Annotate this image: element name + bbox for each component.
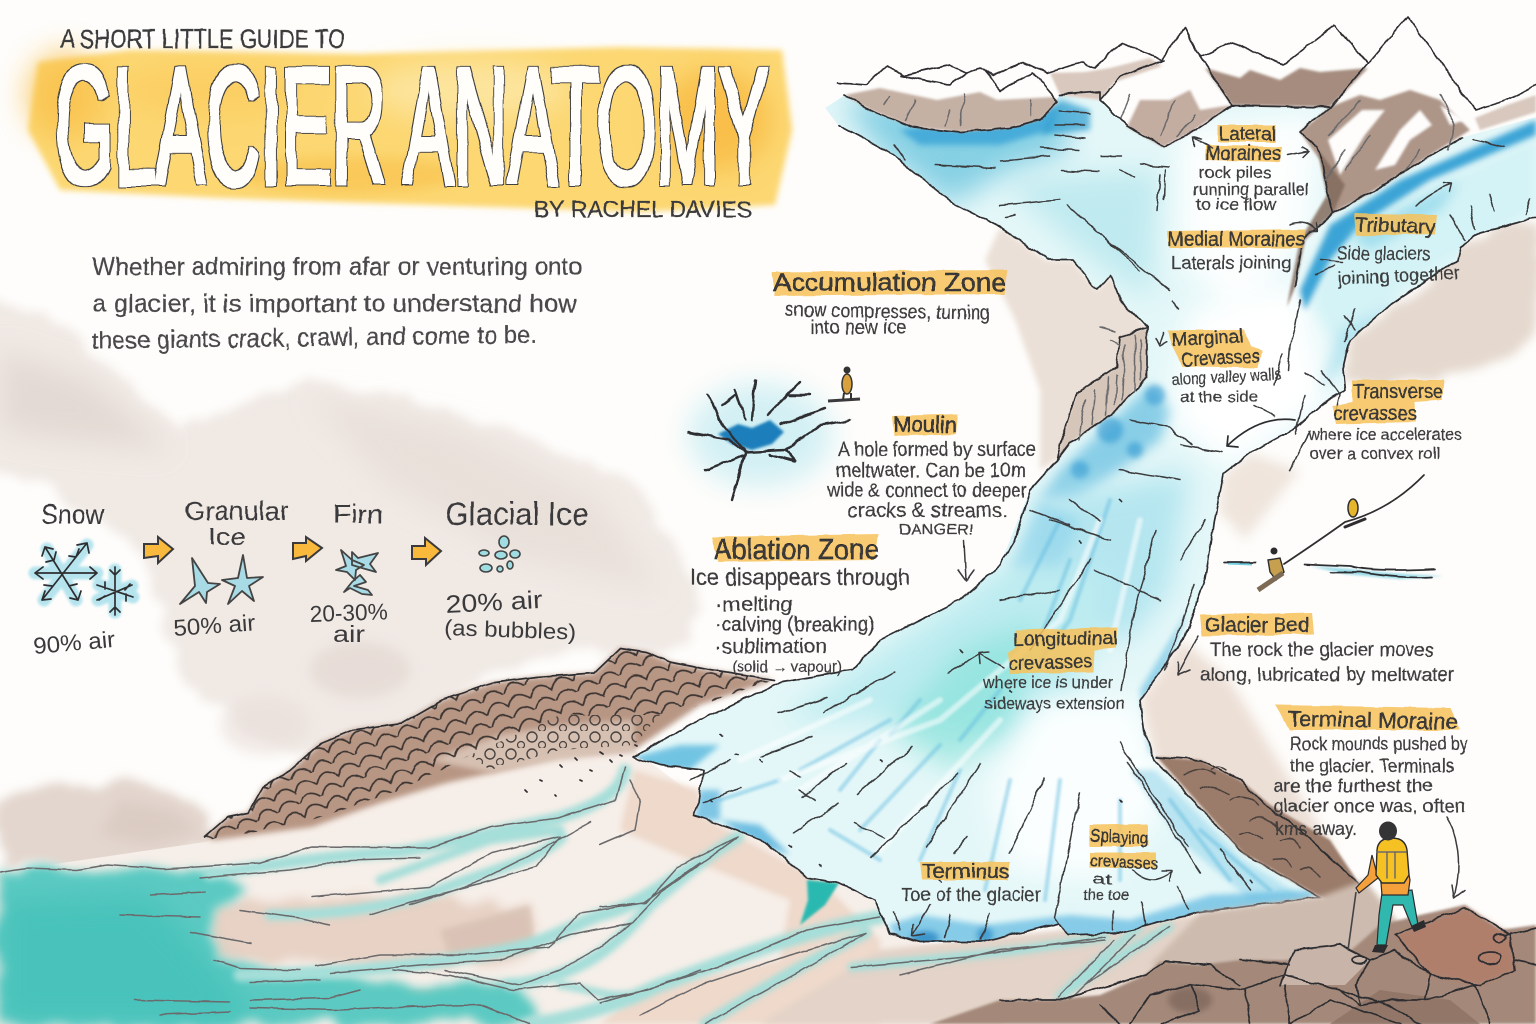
label: splaying crevasses: crevasses: [1090, 851, 1159, 874]
stage: snow: [32, 499, 133, 659]
label: transverse crevasses: where ice accelerates: [1307, 425, 1462, 444]
right moraine and ground: [1150, 757, 1400, 985]
label: medial moraines: Laterals joining: [1171, 253, 1291, 273]
label: terminal moraine: glacier once was, often: [1273, 796, 1465, 816]
label: transverse crevasses: crevasses: [1333, 403, 1417, 425]
label: terminus: [901, 861, 1042, 936]
watercolour clouds: [0, 295, 700, 868]
label: terminal moraine: the glacier. Terminals: [1290, 756, 1454, 776]
head: [1379, 822, 1397, 840]
legs: [1377, 890, 1418, 945]
boots: [1372, 920, 1426, 953]
moulin scale figure: [828, 366, 860, 401]
foreground rocks: [930, 905, 1536, 1024]
rock cliff: [1057, 328, 1147, 460]
label: terminal moraine: are the furthest the: [1273, 776, 1433, 796]
label: moulin: meltwater. Can be 10m: [836, 460, 1026, 482]
label: medial moraines: Medial Moraines: [1168, 228, 1305, 251]
label: ablation zone: ·melting: [715, 594, 793, 616]
label: lateral moraines: Lateral: [1219, 124, 1276, 145]
title wash: [25, 47, 792, 212]
label: ablation zone: ·calving (breaking): [715, 614, 875, 636]
label: moulin: [826, 412, 1036, 581]
arrow: snow to granular: [144, 537, 173, 563]
left moraine: [205, 648, 774, 840]
label: longitudinal crevasses: Longitudinal: [1013, 628, 1118, 651]
label: moulin: Moulin: [893, 412, 957, 437]
label: marginal crevasses: [1156, 326, 1282, 406]
label: transverse crevasses: Transverse: [1353, 381, 1443, 403]
label: tributary: Side glaciers: [1337, 244, 1430, 265]
label: transverse crevasses: over a convex roll: [1310, 444, 1440, 463]
stage: granular ice: Granular: [184, 496, 289, 526]
label: terminal moraine: kms away.: [1275, 819, 1357, 839]
label: accumulation zone: Accumulation Zone: [773, 269, 1006, 297]
label: longitudinal crevasses: crevasses: [1008, 651, 1093, 675]
ground slopes: [985, 217, 1536, 853]
label: ablation zone: ·sublimation: [715, 636, 827, 658]
arm: [1356, 855, 1378, 893]
label: accumulation zone: snow compresses, turning: [785, 299, 990, 325]
label: glacier bed: Glacier Bed: [1205, 614, 1309, 637]
label: ablation zone: [690, 534, 910, 676]
stage: firn: Firn: [333, 499, 383, 529]
label: tributary: [1336, 183, 1460, 289]
label: glacier bed: along, lubricated by meltwater: [1200, 665, 1455, 686]
label: terminal moraine: Rock mounds pushed by: [1290, 734, 1468, 754]
label: terminal moraine: [1273, 705, 1468, 898]
label: medial moraines: [1167, 222, 1317, 273]
stage: granular ice: Ice: [208, 523, 246, 551]
label: terminus: Toe of the glacier: [901, 885, 1042, 906]
label: longitudinal crevasses: [979, 627, 1125, 713]
label: glacier bed: [1178, 612, 1455, 686]
label: lateral moraines: [1193, 124, 1309, 214]
label: moulin: A hole formed by surface: [838, 439, 1036, 461]
intro text: these giants crack, crawl, and come to be.: [92, 321, 537, 355]
label: marginal crevasses: along valley walls: [1171, 366, 1282, 389]
intro text: a glacier, it is important to understand how: [92, 290, 578, 318]
label: marginal crevasses: at the side: [1180, 389, 1258, 406]
label: ablation zone: Ice disappears through: [690, 564, 910, 590]
panel: ice formation stages: [32, 496, 589, 659]
label: splaying crevasses: at: [1092, 871, 1113, 888]
label: lateral moraines: to ice flow: [1196, 195, 1277, 214]
label: moulin: wide & connect to deeper: [826, 480, 1027, 502]
stage: glacial ice: 20% air: [445, 586, 543, 619]
label: tributary: joining together: [1336, 263, 1460, 289]
stage: firn: 20-30%: [309, 598, 388, 627]
label: glacier bed: The rock the glacier moves: [1210, 640, 1434, 661]
stage: snow: 90% air: [32, 626, 116, 659]
label: lateral moraines: rock piles: [1199, 163, 1271, 182]
label: splaying crevasses: Splaying: [1090, 826, 1149, 848]
stage: firn: [309, 499, 388, 647]
label: tributary: Tributary: [1355, 214, 1436, 239]
roped climbers diagram: [1224, 475, 1444, 590]
hiker: [1348, 822, 1426, 953]
stage: firn: air: [333, 621, 365, 647]
label: lateral moraines: Moraines: [1205, 143, 1281, 165]
label: marginal crevasses: Marginal: [1171, 326, 1244, 351]
stage: granular ice: 50% air: [173, 609, 257, 641]
stage: glacial ice: [444, 496, 589, 645]
stage: granular ice: [173, 496, 289, 641]
label: longitudinal crevasses: sideways extension: [985, 694, 1125, 713]
label: accumulation zone: [772, 269, 1008, 339]
label: moulin: DANGER!: [899, 521, 974, 538]
label: marginal crevasses: Crevasses: [1181, 346, 1260, 371]
label: accumulation zone: into new ice: [810, 317, 907, 339]
sea and braided river: [0, 745, 1370, 1024]
byline: BY RACHEL DAVIES: [534, 196, 752, 222]
label: splaying crevasses: the toe: [1083, 887, 1129, 904]
label: ablation zone: Ablation Zone: [714, 534, 879, 566]
label: splaying crevasses: [1083, 824, 1172, 904]
glacier body: [600, 80, 1536, 960]
intro text: Whether admiring from afar or venturing onto: [92, 253, 582, 281]
label: terminus: Terminus: [922, 861, 1010, 883]
intro text: [92, 253, 582, 355]
stage: snow: Snow: [41, 499, 105, 531]
stage: glacial ice: (as bubbles): [444, 615, 577, 645]
label: lateral moraines: running parallel: [1193, 180, 1309, 199]
label: longitudinal crevasses: where ice is under: [982, 673, 1113, 692]
label: ablation zone: (solid → vapour): [732, 659, 842, 676]
arrow: granular to firn: [293, 537, 322, 561]
moulin illustration: [688, 380, 850, 500]
label: moulin: cracks & streams.: [848, 500, 1008, 522]
title: small line: A SHORT LITTLE GUIDE TO: [60, 24, 345, 54]
jacket: [1378, 848, 1410, 895]
backpack: [1376, 838, 1409, 883]
label: terminal moraine: Terminal Moraine: [1288, 706, 1458, 734]
hiking pole: [1348, 892, 1356, 950]
arrow: firn to glacial ice: [412, 538, 441, 565]
label: transverse crevasses: [1307, 380, 1462, 463]
mountains: [838, 17, 1536, 307]
stage: glacial ice: Glacial Ice: [445, 496, 589, 532]
arrow: marginal to transverse: [1227, 419, 1295, 447]
